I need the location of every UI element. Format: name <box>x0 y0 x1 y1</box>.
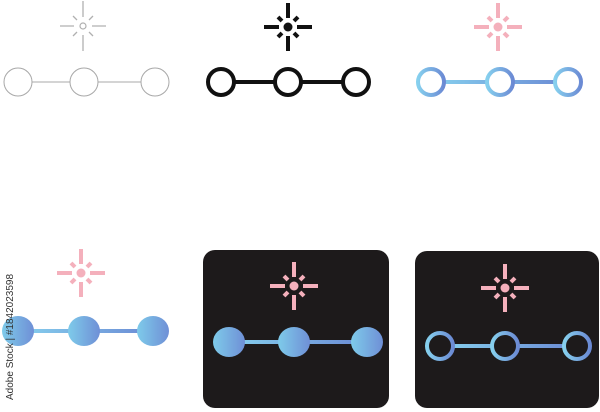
icon: gradient filled <box>2 249 169 346</box>
sparkle: black <box>264 3 312 51</box>
sparkle: thin <box>60 1 106 51</box>
sparkle: dark panel 1 <box>270 262 318 310</box>
sparkle: pink <box>474 3 522 51</box>
sparkle: dark panel 2 <box>481 264 529 312</box>
icon: thin outline <box>4 1 169 96</box>
timeline: filled <box>2 316 169 346</box>
icon: gradient outline <box>418 3 581 95</box>
panel: dark filled <box>203 250 389 408</box>
sparkle: pink filled icon <box>57 249 105 297</box>
icon: bold black <box>208 3 369 95</box>
timeline: gradient outline <box>418 69 581 95</box>
watermark text: Adobe Stock | #1842023598 <box>5 274 16 400</box>
timeline: thin <box>4 68 169 96</box>
timeline: dark filled <box>213 327 383 357</box>
panel: dark outline <box>415 251 599 408</box>
timeline: dark outline <box>427 333 590 359</box>
timeline: black <box>208 69 369 95</box>
